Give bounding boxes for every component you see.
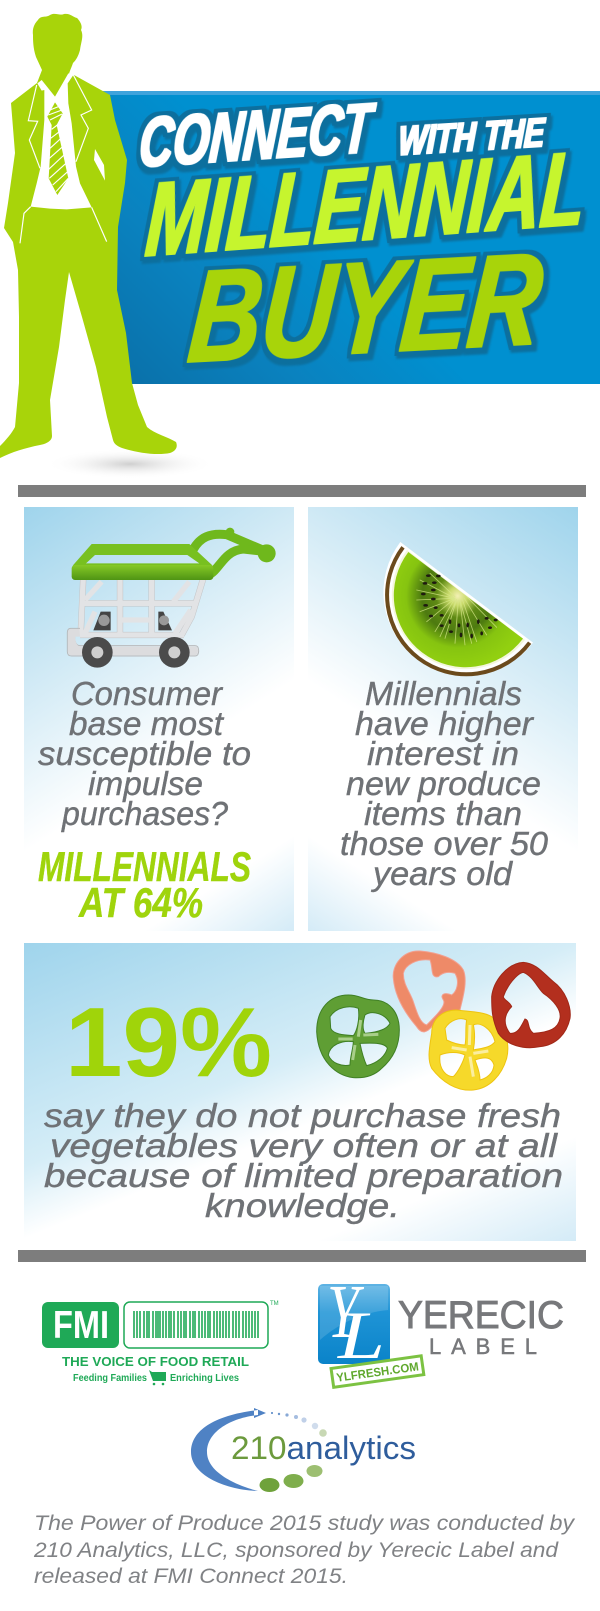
footer note: The Power of Produce 2015 study was conducted by: [34, 1512, 576, 1535]
logo: Yerecic Label: L: [337, 1297, 385, 1373]
logo: FMI: THE VOICE OF FOOD RETAIL: [62, 1354, 249, 1369]
panel: new produce interest: [308, 507, 578, 931]
statement text: say they do not purchase fresh: [44, 1097, 561, 1134]
callout: millennials at 64%: MILLENNIALS: [38, 843, 251, 890]
barcode: [134, 1311, 258, 1338]
logo: FMI: [42, 1301, 279, 1385]
logo: FMI: Feeding Families: [73, 1373, 147, 1384]
title line: CONNECT: CONNECT: [137, 87, 378, 182]
question text: susceptible to: [38, 735, 251, 772]
question text: base most: [69, 705, 225, 742]
statement text: Millennials: [365, 675, 522, 712]
callout: millennials at 64%: [38, 843, 251, 926]
shirt and jacket details: [20, 73, 107, 243]
logo: FMI: TM: [270, 1301, 279, 1307]
question text: Consumer: [71, 675, 224, 712]
footer note: released at FMI Connect 2015.: [34, 1565, 348, 1588]
title line: WITH THE: WITH THE: [398, 109, 546, 164]
logo: Yerecic Label: Y: [327, 1270, 365, 1354]
header banner: [100, 91, 600, 384]
logo: Yerecic Label: LABEL: [429, 1334, 537, 1359]
statement text: have higher: [355, 705, 535, 742]
icon: shopping cart: [67, 528, 276, 668]
statement text: those over 50: [340, 825, 549, 862]
logo: 210 analytics: [191, 1408, 416, 1492]
question text: purchases?: [61, 795, 229, 832]
statement text: new produce: [346, 765, 541, 802]
big number 19%: 19%: [65, 987, 272, 1097]
question text: impulse: [88, 765, 203, 802]
icon: man in suit silhouette: [0, 14, 177, 458]
statement text: because of limited preparation: [44, 1157, 563, 1194]
logo: Yerecic Label: YERECIC: [398, 1294, 564, 1337]
figure shadow: [45, 449, 215, 479]
stamp: ylfresh.com: YLFRESH.COM: [335, 1359, 420, 1385]
bottom divider bar: [18, 1250, 586, 1262]
statement text: knowledge.: [205, 1187, 400, 1224]
footer note: 210 Analytics, LLC, sponsored by Yerecic Label and: [33, 1539, 559, 1562]
footer note: [33, 1512, 576, 1588]
statement text: vegetables very often or at all: [50, 1127, 559, 1164]
logo: FMI: Enriching Lives: [170, 1373, 239, 1384]
statement text: years old: [371, 855, 514, 892]
statement text: items than: [364, 795, 522, 832]
statement text: interest in: [367, 735, 519, 772]
panel: impulse purchases: [24, 507, 294, 931]
question text: [38, 675, 251, 832]
arc arrow: [191, 1408, 327, 1491]
title: [137, 87, 589, 390]
top divider bar: [18, 485, 586, 497]
statement text: [44, 1097, 563, 1224]
icon: bell pepper slices: [317, 951, 570, 1090]
icon: small cart: [149, 1370, 166, 1385]
callout: millennials at 64%: AT 64%: [78, 879, 203, 926]
statement text: [340, 675, 549, 892]
logo: 210 analytics: 210analytics: [231, 1430, 416, 1466]
panel: 19 percent: [24, 943, 576, 1241]
logo: FMI: FMI: [53, 1304, 109, 1347]
icon: kiwi slice: [383, 542, 533, 676]
necktie: [47, 102, 68, 195]
logo: Yerecic Label: [318, 1270, 564, 1387]
